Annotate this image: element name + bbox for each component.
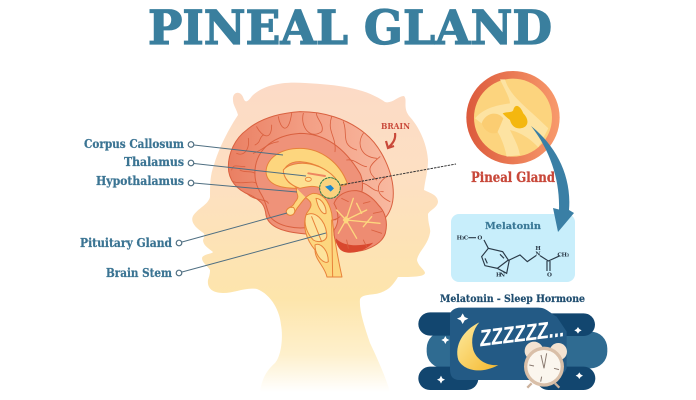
thalamus [283, 163, 338, 188]
gyri folds [232, 113, 390, 203]
anatomy labels: Thalamus [124, 155, 184, 169]
dashed pointer line [341, 164, 456, 185]
dark cloud pills [418, 312, 478, 336]
corpus callosum [266, 148, 347, 188]
molecule: HN [496, 272, 505, 278]
zzz text: ZZZZZZ... [477, 315, 566, 351]
night scene [418, 308, 607, 390]
anatomy labels: Hypothalamus [96, 174, 184, 188]
brain label [381, 121, 410, 148]
pineal gland magnified circle [466, 71, 560, 164]
brain stem and pituitary [286, 188, 342, 277]
curved arrow [531, 126, 574, 232]
sleep hormone heading: Melatonin - Sleep Hormone [440, 293, 585, 305]
centre panel [450, 308, 567, 380]
back cloud [427, 332, 607, 368]
inner cortex band [255, 133, 363, 228]
anatomy labels [80, 137, 184, 280]
anatomy labels: Brain Stem [106, 266, 172, 280]
molecule: CH₃ [557, 253, 569, 259]
pineal highlight [320, 178, 340, 198]
molecule: H [535, 246, 541, 252]
brain [228, 112, 393, 277]
head silhouette [192, 83, 438, 392]
cerebrum [228, 112, 393, 234]
molecule: H₃C [457, 236, 469, 242]
melatonin panel: Melatonin [485, 221, 541, 232]
brain label: BRAIN [381, 121, 410, 131]
label lines [176, 142, 326, 276]
title: PINEAL GLAND [148, 1, 552, 56]
molecule [457, 236, 569, 278]
pineal gland label: Pineal Gland [471, 170, 555, 186]
molecule: O [547, 272, 552, 278]
molecule: O [477, 236, 482, 242]
moon [457, 322, 498, 370]
melatonin panel [451, 214, 575, 282]
stars [437, 313, 583, 384]
alarm clock [524, 342, 567, 388]
molecule: N [535, 252, 540, 258]
anatomy labels: Corpus Callosum [84, 137, 184, 151]
cerebellum [334, 191, 386, 252]
anatomy labels: Pituitary Gland [80, 236, 173, 250]
